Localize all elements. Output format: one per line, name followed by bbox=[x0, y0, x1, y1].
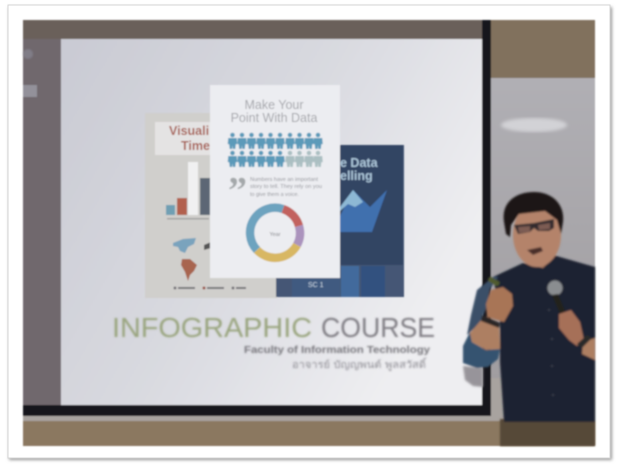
quote text bbox=[250, 177, 322, 198]
screen top edge bbox=[23, 20, 491, 39]
quote text: to give them a voice. bbox=[250, 192, 299, 198]
slide title: INFOGRAPHIC bbox=[112, 312, 312, 343]
quote text: Numbers have an important bbox=[250, 177, 319, 183]
card heading bbox=[231, 98, 317, 125]
pictogram: people bbox=[228, 133, 323, 167]
card heading: Point With Data bbox=[231, 111, 317, 125]
wall upper right bbox=[491, 20, 595, 78]
left infographic card bbox=[145, 113, 277, 298]
forearm bbox=[470, 319, 500, 350]
dashboard tiles: SC 1 bbox=[308, 282, 324, 289]
projector screen left edge bbox=[23, 39, 61, 405]
world map bbox=[173, 238, 211, 281]
belt bbox=[504, 412, 595, 420]
card heading: Data Storytelling: e Data bbox=[340, 156, 379, 170]
card heading: Make Your bbox=[244, 98, 304, 112]
bar chart bbox=[166, 162, 210, 220]
projected slide bbox=[61, 39, 482, 405]
card heading: Visualize Time bbox=[169, 124, 210, 153]
microphone bbox=[548, 280, 568, 321]
donut label: Year bbox=[269, 232, 281, 238]
card heading: Data Storytelling: elling bbox=[340, 169, 373, 183]
arm shadow on screen bbox=[463, 366, 483, 387]
slide content bbox=[112, 85, 595, 446]
whiteboard bbox=[491, 78, 595, 378]
upper sleeve bbox=[467, 277, 498, 335]
hand holding microphone bbox=[559, 310, 584, 346]
slide subtitle: Faculty of Information Technology bbox=[244, 344, 430, 356]
area chart bbox=[340, 190, 387, 232]
presenter name: อาจารย์ บัญญพนต์ พูลสวัสดิ์ bbox=[292, 357, 428, 371]
wristband bbox=[481, 315, 500, 328]
head bbox=[504, 192, 563, 267]
floor band bbox=[23, 378, 595, 446]
quote mark: ” bbox=[228, 170, 247, 212]
quote text: story to tell. They rely on you bbox=[250, 184, 322, 190]
card heading: Data Storytelling bbox=[340, 156, 379, 183]
slide title: COURSE bbox=[321, 312, 435, 343]
map legend bbox=[174, 286, 246, 290]
centre infographic card bbox=[210, 85, 340, 278]
donut chart bbox=[250, 208, 300, 258]
slide title bbox=[112, 312, 435, 343]
shirt buttons bbox=[548, 309, 554, 396]
card heading: Visualize Time: Visuali bbox=[169, 124, 209, 138]
rolled sleeve bbox=[463, 332, 500, 368]
presenter bbox=[463, 192, 595, 446]
card heading: Visualize Time: Time bbox=[181, 139, 210, 153]
glasses bbox=[514, 219, 554, 234]
raised hand with pointer bbox=[486, 276, 513, 322]
trousers bbox=[500, 419, 595, 446]
wrist and watch bbox=[582, 338, 595, 360]
shirt bbox=[493, 255, 595, 422]
neck bbox=[524, 248, 553, 268]
screen black frame bbox=[23, 20, 491, 416]
dashboard tiles bbox=[292, 266, 385, 297]
mouth bbox=[527, 247, 543, 255]
right infographic card bbox=[276, 145, 404, 297]
